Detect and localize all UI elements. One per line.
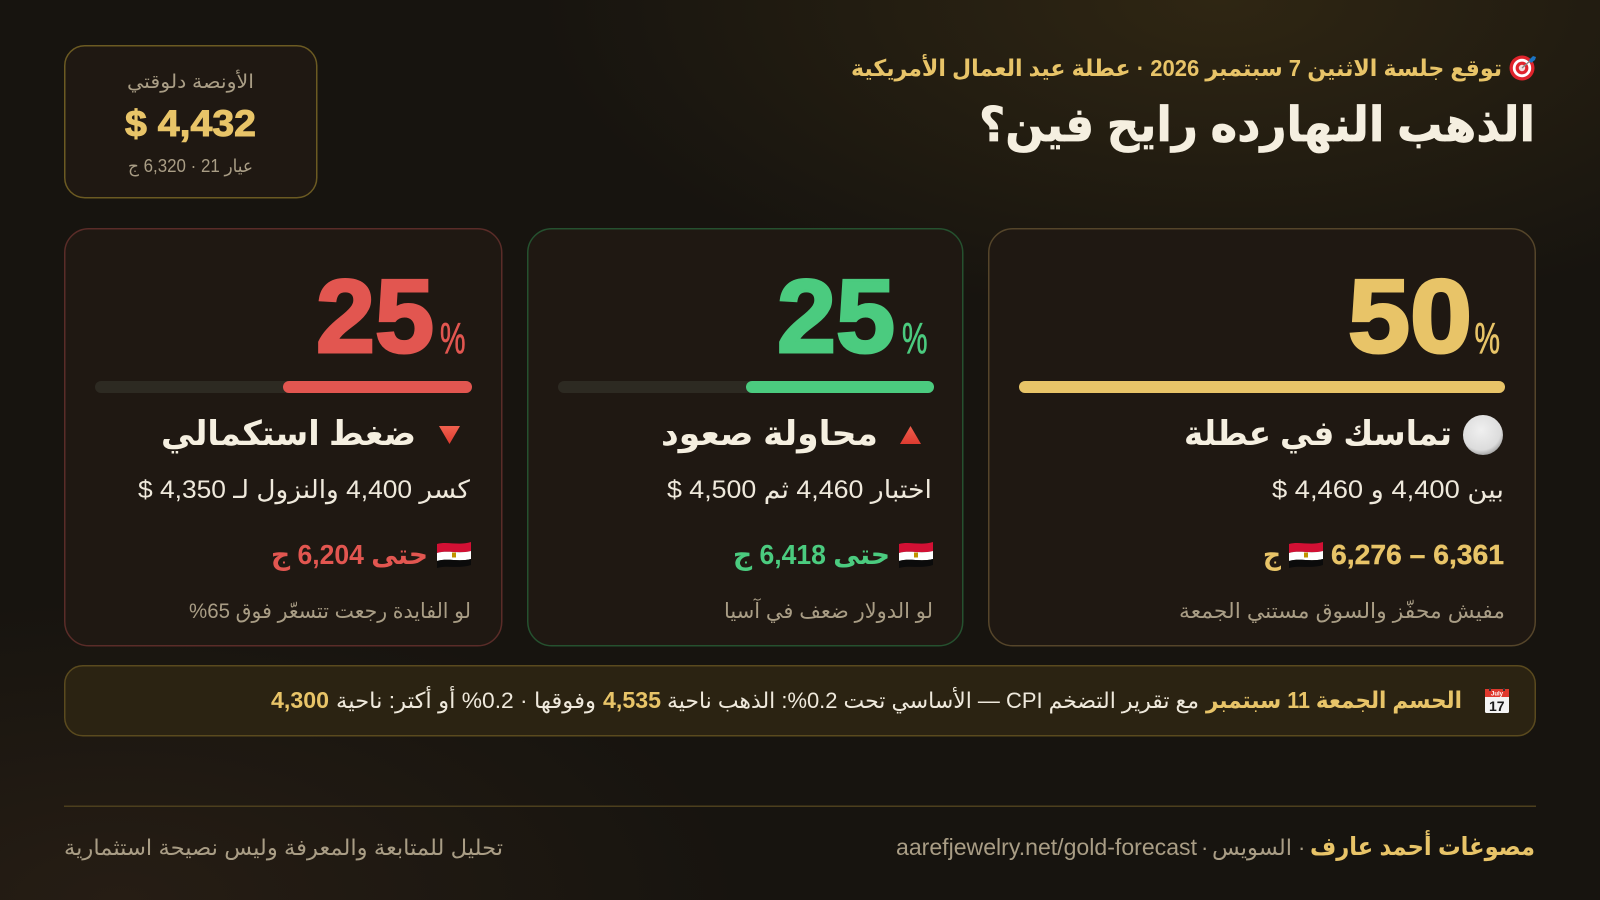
percentage 25: % [902, 314, 928, 363]
price value: $ 4,432 [125, 103, 256, 144]
probability bar [1019, 381, 1505, 393]
price label: الأونصة دلوقتي [127, 70, 254, 93]
percentage 50: 50 [1348, 259, 1472, 375]
price range: بين 4,400 و 4,460 $ [1272, 476, 1504, 505]
probability bar [558, 381, 934, 393]
brand name: مصوغات أحمد عارف [1310, 830, 1535, 862]
price range: كسر 4,400 والنزول لـ 4,350 $ [138, 476, 470, 505]
icon: calendar: 17 [1489, 698, 1505, 714]
scenario name: ضغط استكمالي [161, 415, 416, 454]
footer [64, 830, 1535, 862]
condition note: لو الفايدة رجعت تتسعّر فوق 65% [189, 600, 471, 623]
icon: white circle [1463, 415, 1503, 455]
callout body: مع تقرير التضخم CPI — الأساسي تحت 0.2%: الذهب ناحية [667, 687, 1199, 714]
separator dot: · [1201, 835, 1208, 860]
percentage 50: % [1474, 314, 1500, 363]
local price: حتى 6,204 ج [271, 539, 428, 572]
panel: current price [65, 46, 317, 198]
icon: calendar: July [1491, 692, 1504, 698]
price local: عيار 21 · 6,320 ج [128, 156, 253, 177]
condition note: مفيش محفّز والسوق مستني الجمعة [1179, 599, 1505, 623]
icon: calendar [1485, 688, 1509, 714]
callout: decision day [65, 666, 1535, 736]
percentage 25: 25 [316, 259, 434, 375]
panel: downside scenario [65, 229, 502, 646]
panel: sideways scenario [989, 229, 1535, 646]
lower target: 4,300 [271, 687, 329, 713]
local price: ج [1263, 539, 1282, 572]
callout body continued: وفوقها · 0.2% أو أكتر: ناحية [336, 686, 596, 713]
callout lead: الحسم الجمعة 11 سبتمبر [1205, 687, 1462, 714]
website: aarefjewelry.net/gold-forecast [896, 834, 1198, 860]
icon: up triangle [900, 426, 921, 444]
scenario name: محاولة صعود [661, 415, 878, 454]
local price [1263, 539, 1504, 572]
disclaimer: تحليل للمتابعة والمعرفة وليس نصيحة استثمارية [64, 835, 503, 861]
upper target: 4,535 [603, 687, 661, 713]
panel: upside scenario [528, 229, 963, 646]
icon: target [1510, 56, 1536, 80]
percentage 25: % [440, 314, 466, 363]
icon: down triangle [439, 426, 460, 444]
subtitle: توقع جلسة الاثنين 7 سبتمبر 2026 · عطلة عيد العمال الأمريكية [851, 53, 1502, 82]
main title: الذهب النهارده رايح فين؟ [979, 99, 1535, 153]
condition note: لو الدولار ضعف في آسيا [724, 598, 933, 623]
probability bar [95, 381, 472, 393]
local price: 6,276 – 6,361 [1331, 539, 1504, 570]
separator dot: · [1298, 835, 1305, 860]
percentage 25: 25 [777, 259, 895, 375]
price range: اختبار 4,460 ثم 4,500 $ [667, 476, 932, 505]
location: السويس [1212, 835, 1292, 861]
local price: حتى 6,418 ج [733, 539, 890, 572]
scenario name: تماسك في عطلة [1184, 415, 1452, 454]
title block [851, 53, 1536, 153]
